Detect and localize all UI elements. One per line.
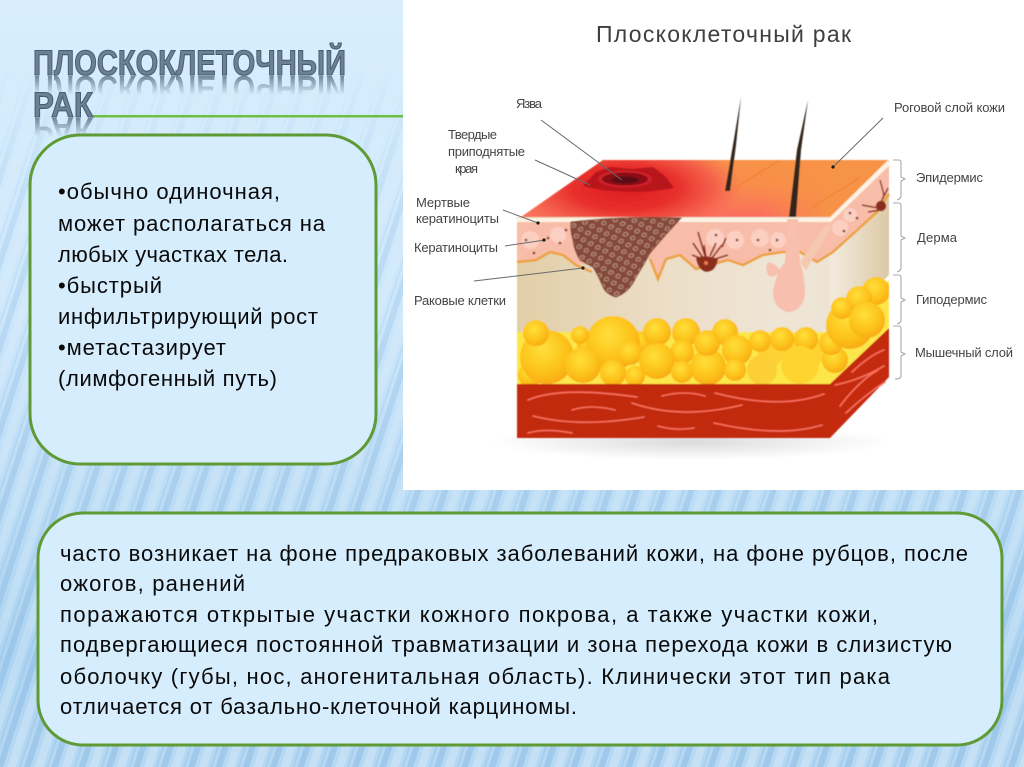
diagram labels: приподнятые — [448, 144, 525, 159]
hair follicle — [766, 219, 832, 312]
diagram labels: кератиноциты — [416, 211, 499, 226]
text block: key features list: •обычно одиночная, — [58, 179, 280, 204]
text block: description — [60, 541, 968, 719]
dermis layer — [517, 160, 889, 342]
melanocyte: right side — [862, 180, 888, 212]
diagram labels: Раковые клетки — [414, 293, 506, 308]
block shadow — [490, 424, 890, 460]
text block: description: часто возникает на фоне предраковых заболеваний кожи, на фоне рубцов, после — [60, 541, 968, 566]
layer brackets — [893, 160, 905, 379]
title: РАК — [33, 86, 94, 125]
epidermis layer — [517, 163, 889, 279]
diagram labels: Дерма — [917, 230, 958, 245]
muscle layer — [517, 328, 889, 438]
diagram labels: Гиподермис — [916, 292, 988, 307]
title — [33, 43, 346, 149]
diagram labels: Мертвые — [416, 195, 470, 210]
diagram labels: Твердые — [448, 127, 497, 142]
text block: key features list: •метастазирует — [58, 335, 226, 360]
fat layer — [517, 277, 890, 387]
leader lines — [474, 118, 883, 281]
melanocyte — [692, 232, 728, 272]
text block: key features list: любых участках тела. — [58, 242, 288, 267]
diagram labels: Роговой слой кожи — [894, 100, 1005, 115]
text block: key features list — [58, 179, 326, 391]
diagram title: Плоскоклеточный рак — [596, 21, 852, 47]
tumour cells — [571, 218, 681, 297]
text block: description: отличается от базально-клеточной карциномы. — [60, 694, 577, 719]
panel: diagram background — [403, 0, 1024, 490]
text block: description: оболочку (губы, нос, аногенитальная область). Клинически этот тип рака — [60, 664, 891, 689]
text block: key features list: может располагаться на — [58, 211, 326, 236]
title: РАК — [33, 110, 94, 149]
panel: risk factors and localisation — [38, 513, 1002, 745]
diagram labels: Язва — [516, 96, 543, 111]
text block: description: поражаются открытые участки кожного покрова, а также участки кожи, — [60, 602, 878, 627]
diagram labels: края — [455, 161, 478, 176]
text block: key features list: •быстрый — [58, 273, 162, 298]
text block: key features list: инфильтрирующий рост — [58, 304, 318, 329]
diagram labels — [414, 21, 1013, 360]
text block: description: ожогов, ранений — [60, 571, 245, 596]
text block: description: подвергающиеся постоянной травматизации и зона перехода кожи в слизистую — [60, 632, 952, 657]
diagram labels: Эпидермис — [916, 170, 984, 185]
title underline — [93, 115, 404, 118]
hairs — [725, 97, 808, 217]
diagram labels: Мышечный слой — [915, 345, 1013, 360]
diagram labels: Кератиноциты — [414, 240, 498, 255]
title: ПЛОСКОКЛЕТОЧНЫЙ — [33, 43, 346, 83]
diagram: skin cross-section — [414, 21, 1013, 460]
title: ПЛОСКОКЛЕТОЧНЫЙ — [33, 68, 346, 108]
top face: cornified layer — [521, 159, 888, 218]
panel: key features — [30, 135, 376, 464]
ulcer — [583, 167, 674, 192]
text block: key features list: (лимфогенный путь) — [58, 366, 277, 391]
